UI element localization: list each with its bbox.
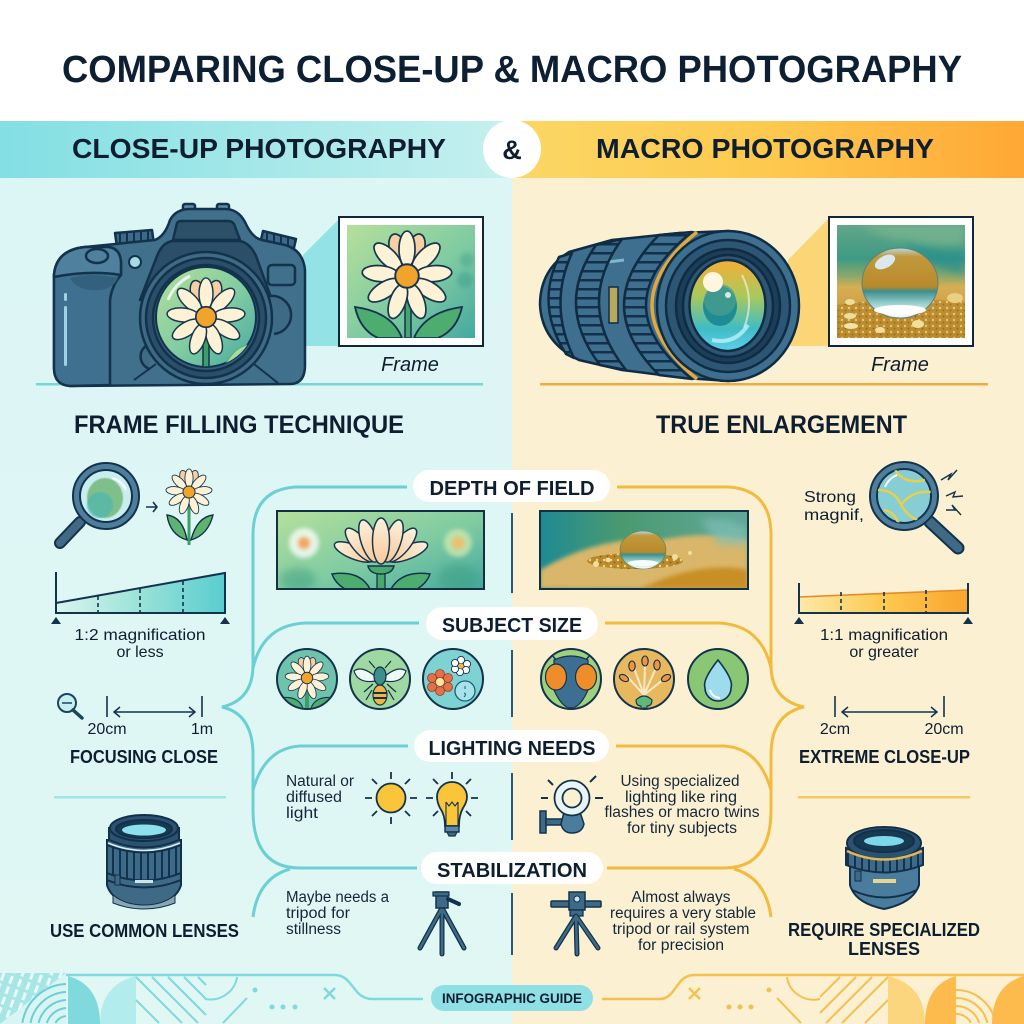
icon: tripod [420,892,464,954]
strong magnification label: magnif, [804,507,864,524]
label pill: subject size: SUBJECT SIZE [442,614,582,637]
text: stable tripod: tripod or rail system [612,921,750,938]
label: use common lenses: USE COMMON LENSES [50,921,239,941]
label pill: subject size [426,607,598,640]
focusing distance: FOCUSING CLOSE [70,747,218,767]
footer pill: INFOGRAPHIC GUIDE [442,991,582,1006]
label pill: lighting needs: LIGHTING NEEDS [428,737,596,760]
focusing distance [58,694,218,767]
ampersand badge: & [502,135,522,165]
footer decoration: macro [602,975,1024,1024]
heading: frame filling technique: FRAME FILLING TECHNIQUE [74,411,404,439]
working distance [799,696,970,767]
stabilization: macro [551,889,756,954]
title: COMPARING CLOSE-UP & MACRO PHOTOGRAPHY [62,49,962,91]
heading: true enlargement: TRUE ENLARGEMENT [656,411,907,439]
background: close-up side [0,178,512,1024]
header band: close-up: CLOSE-UP PHOTOGRAPHY [72,133,446,164]
background: macro side [512,178,1024,1024]
text: stable tripod [610,889,756,954]
label pill: depth of field: DEPTH OF FIELD [430,477,594,500]
icon: precision tripod [551,892,601,954]
text: specialized lighting: Using specialized [620,773,740,790]
chart: 1:1 magnification [794,583,973,661]
beam to frame [303,219,339,346]
text: specialized lighting: lighting like ring [625,789,737,806]
label: require specialized lenses: LENSES [848,939,920,959]
icon: specialized lens [846,827,923,909]
panel: macro hero [540,217,988,439]
text: specialized lighting [604,773,760,837]
lighting: close-up [286,772,478,836]
working distance: 20cm [924,721,964,738]
header band: macro: MACRO PHOTOGRAPHY [596,133,934,164]
text: specialized lighting: flashes or macro twins [604,804,760,821]
text: stable tripod: for precision [638,937,724,954]
beam to frame [788,218,829,346]
chart: 1:2 magnification: 1:2 magnification [74,627,206,644]
label pill: depth of field [413,470,610,502]
icon: magnifier with texture [870,462,963,548]
stabilization: close-up [286,889,464,954]
focusing distance: 20cm [87,721,127,738]
text: natural light: Natural or [286,773,354,790]
caption: Frame [381,354,439,376]
chart: 1:1 magnification: or greater [849,644,919,661]
connector brace: macro [605,487,804,917]
text: natural light: diffused [286,789,342,806]
icon: light bulb [426,772,478,836]
icon: sun [365,772,417,824]
lighting: macro [540,773,760,837]
ampersand badge [483,120,541,178]
text: maybe tripod [286,889,389,938]
depth photo: macro [540,511,748,589]
panel: macro magnification [788,462,980,959]
panel: close-up hero [36,204,483,439]
connector brace: close-up [222,487,419,917]
label: require specialized lenses: REQUIRE SPECIALIZED [788,920,980,940]
subject icon: tiny flowers [423,649,483,709]
icon: camera [54,204,305,386]
subject icon: daisy [277,649,337,709]
label pill: stabilization [421,852,603,884]
text: natural light [286,773,354,822]
chart: 1:2 magnification [51,572,230,661]
lens glass reflections [703,272,749,341]
camera lens with flower [156,267,256,367]
strong magnification label: Strong [804,489,856,506]
ground line [540,383,988,386]
text: stable tripod: Almost always [632,889,731,906]
label pill: stabilization: STABILIZATION [437,859,587,882]
text: maybe tripod: stillness [286,921,341,938]
footer decoration: close-up [0,973,423,1024]
footer pill [431,985,593,1011]
header band: macro [512,121,1024,178]
chart: 1:2 magnification: or less [116,644,164,661]
text: specialized lighting: for tiny subjects [627,820,737,837]
icon: common lens [107,815,181,909]
ground line [36,383,483,386]
frame: daisy photo [339,217,483,346]
header band: close-up [0,121,512,178]
text: stable tripod: requires a very stable [610,905,756,922]
subject icon: water drop [688,649,748,709]
working distance: 2cm [820,721,850,738]
subject icon: stamen [614,649,674,709]
icon: ring light [540,776,603,833]
label: require specialized lenses [788,920,980,959]
strong magnification label [804,489,864,524]
subject icon: insect eyes [541,649,601,709]
text: maybe tripod: Maybe needs a [286,889,389,906]
label pill: lighting needs [414,730,609,762]
frame: water drop photo [829,217,973,346]
text: natural light: light [286,805,319,822]
working distance: EXTREME CLOSE-UP [799,747,970,767]
icon: macro lens [540,231,799,381]
focusing distance: 1m [191,721,213,738]
centre divider [511,513,513,955]
depth photo: close-up [277,511,484,592]
icon: magnifier and flower [60,463,213,545]
panel: close-up magnification [50,463,239,941]
subject icon: bee [350,649,410,709]
caption: Frame [871,354,929,376]
text: maybe tripod: tripod for [286,905,350,922]
chart: 1:1 magnification: 1:1 magnification [820,627,948,644]
